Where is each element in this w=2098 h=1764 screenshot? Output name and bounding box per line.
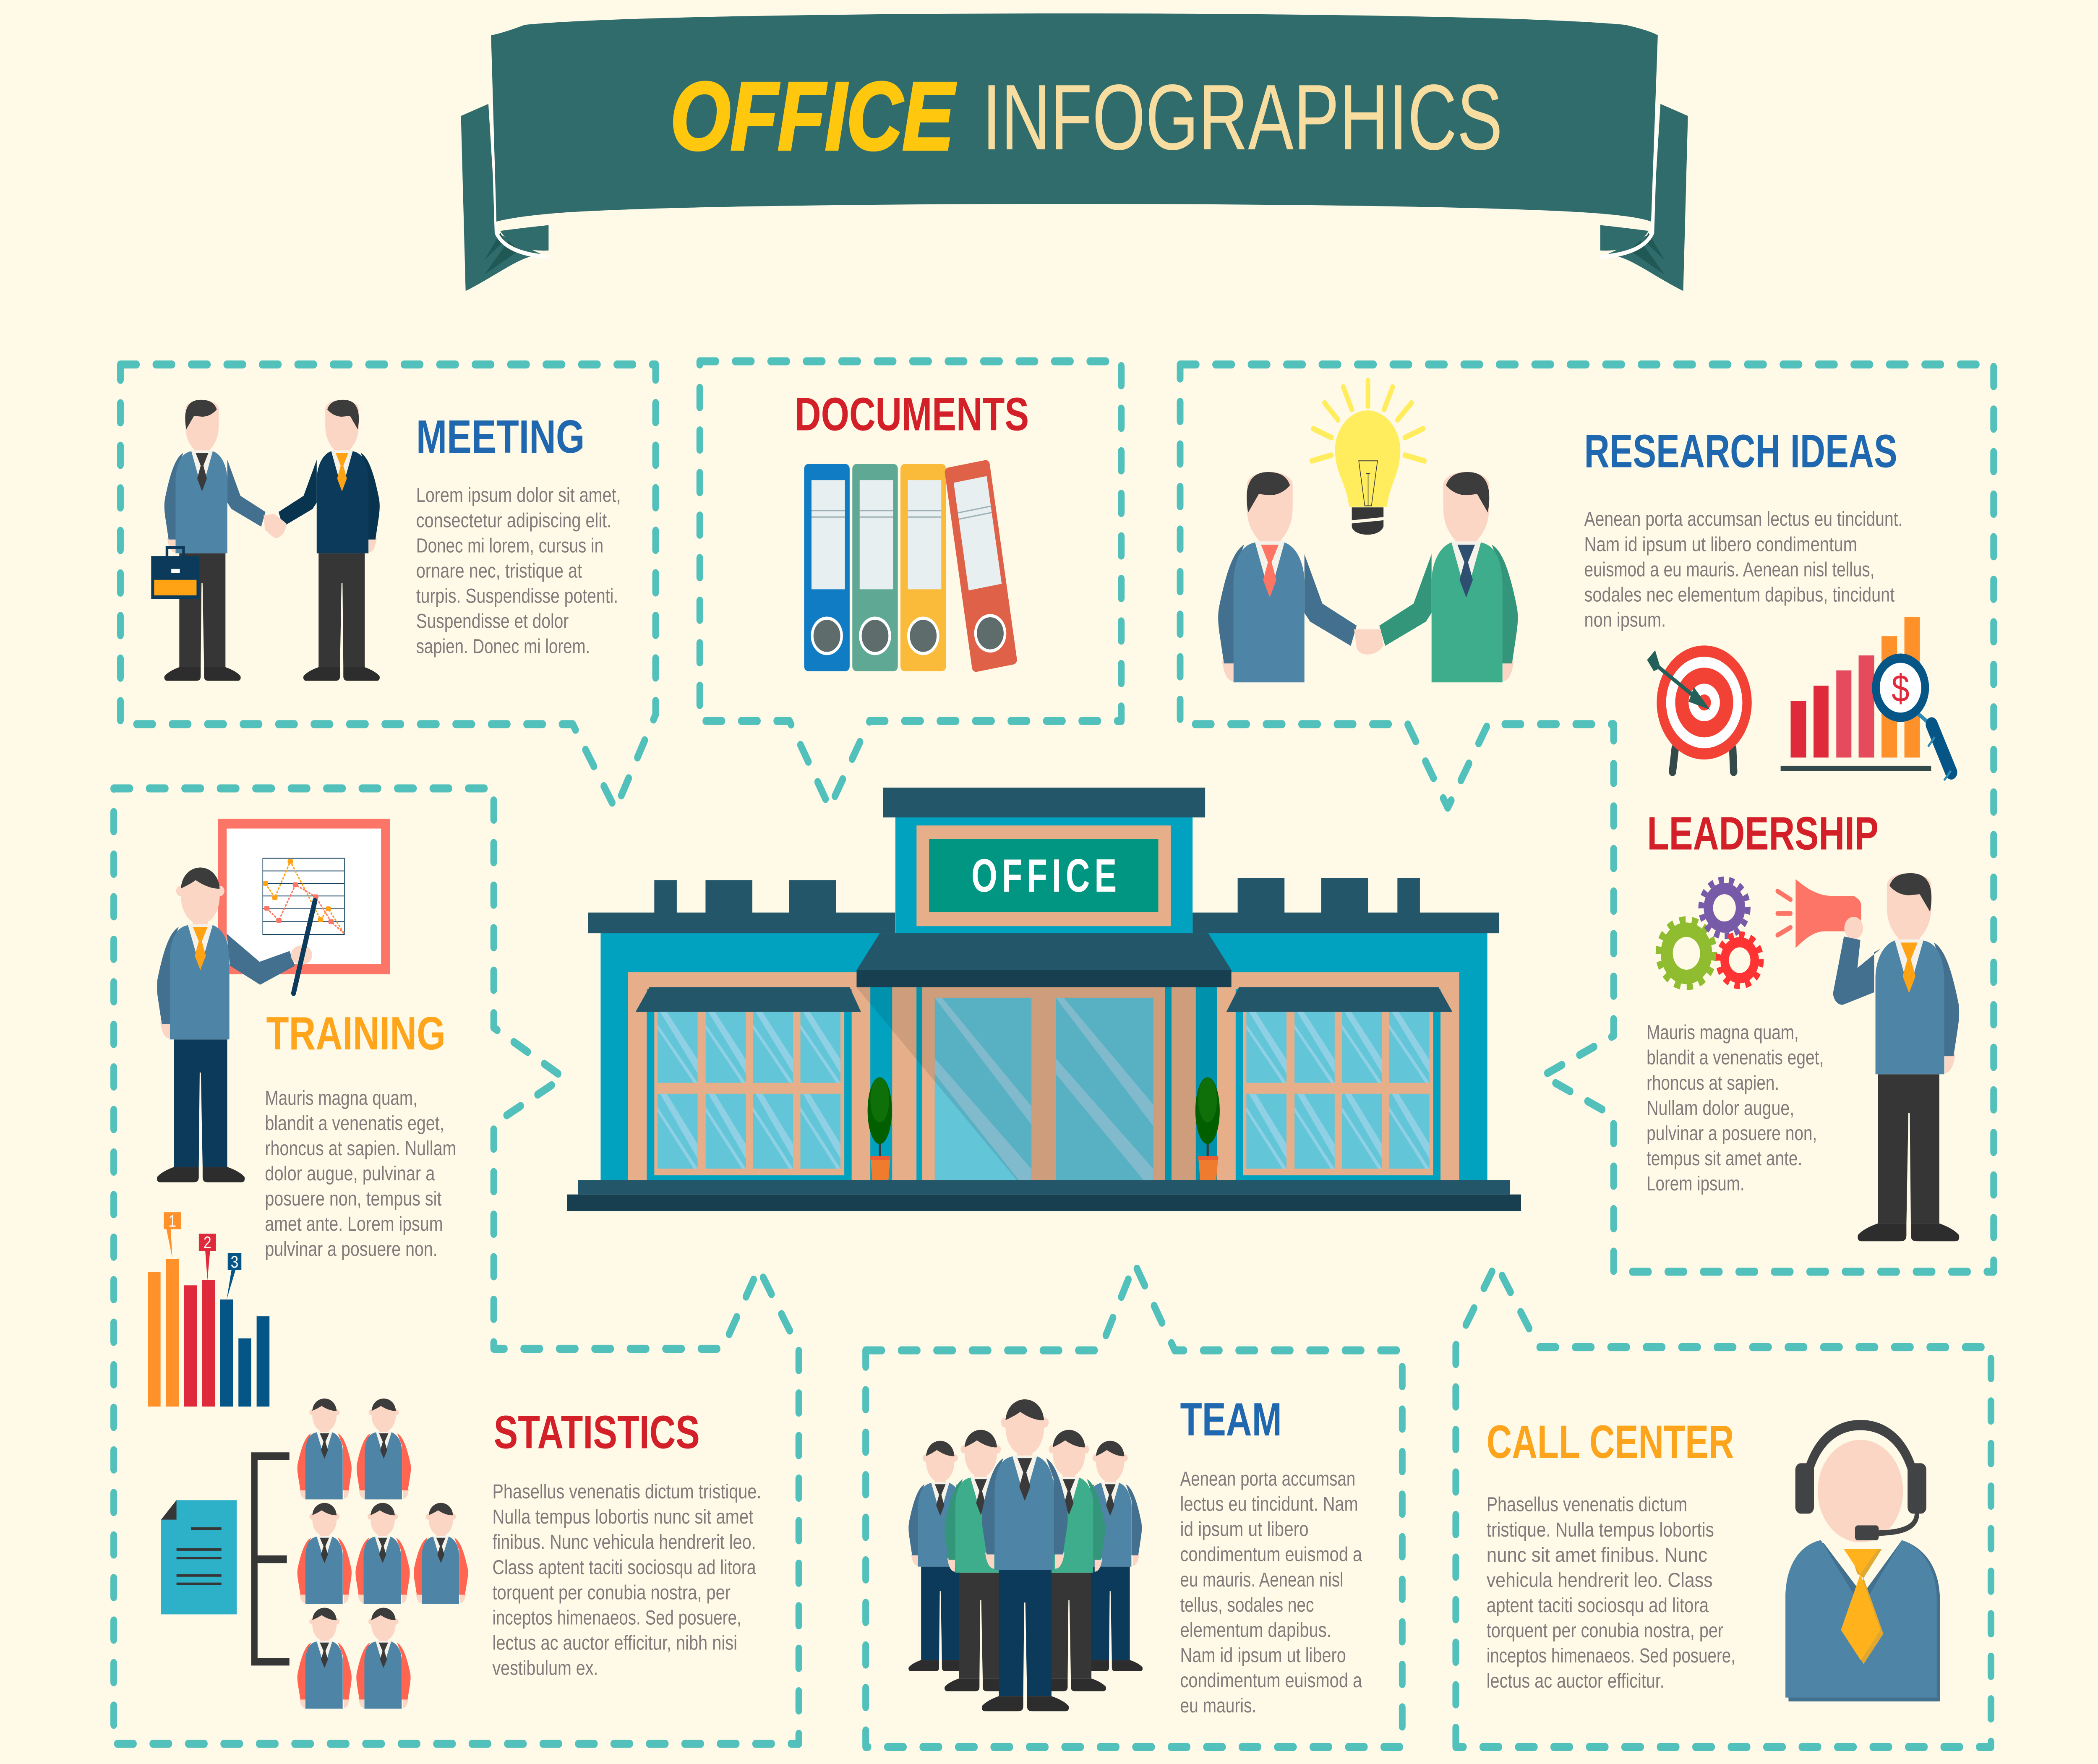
icon: light bulb	[1312, 381, 1424, 535]
text: meeting body: turpis. Suspendisse potenti.	[416, 585, 618, 607]
text: call center body: torquent per conubia nostra, per	[1487, 1620, 1723, 1642]
text: team body: condimentum euismod a	[1180, 1670, 1362, 1692]
text: statistics body: inceptos himenaeos. Sed posuere,	[492, 1607, 741, 1629]
panel: team	[866, 1264, 1402, 1747]
text: training body	[265, 1087, 456, 1260]
right potted plant	[1195, 1077, 1220, 1180]
text: leadership body: Lorem ipsum.	[1647, 1173, 1745, 1195]
central office building	[567, 788, 1521, 1211]
text: research body: euismod a eu mauris. Aenean nisl tellus,	[1584, 558, 1874, 581]
text: research body: sodales nec elementum dapibus, tincidunt	[1584, 584, 1895, 606]
heading: documents: DOCUMENTS	[795, 389, 1029, 440]
icon: bar chart with magnifier	[1781, 617, 1951, 780]
meeting: man with briefcase	[164, 400, 266, 681]
text: team body: eu mauris.	[1180, 1695, 1256, 1717]
icon: gears	[1658, 880, 1761, 987]
panel: training and statistics	[114, 788, 799, 1744]
text: team body: lectus eu tincidunt. Nam	[1180, 1493, 1358, 1515]
text: statistics body: torquent per conubia nostra, per	[492, 1581, 731, 1604]
text: statistics body	[492, 1481, 761, 1679]
training: presenter man	[157, 868, 315, 1182]
text: research body: non ipsum.	[1584, 609, 1666, 631]
text: call center body: tristique. Nulla tempus lobortis	[1487, 1519, 1714, 1541]
bar chart with numbered flags: 3	[231, 1253, 238, 1271]
panel: research ideas and leadership	[1180, 365, 1994, 1272]
main awning	[856, 933, 1232, 987]
bar chart with numbered flags: 2	[204, 1233, 211, 1252]
leadership: man with megaphone	[1833, 873, 1959, 1241]
text: team body: eu mauris. Aenean nisl	[1180, 1568, 1344, 1591]
text: call center body: nunc sit amet finibus. Nunc	[1487, 1544, 1707, 1566]
text: team body: elementum dapibus.	[1180, 1619, 1331, 1641]
heading: call center: CALL CENTER	[1487, 1416, 1734, 1468]
org chart people row 1	[297, 1399, 411, 1499]
awning shadow	[856, 987, 1217, 1180]
icon: yellow binder	[900, 464, 946, 671]
text: meeting body: sapien. Donec mi lorem.	[416, 635, 590, 658]
dashed callout outline	[1456, 1264, 1991, 1747]
team group of five men	[908, 1399, 1143, 1711]
icon: green binder	[852, 464, 898, 671]
text: training body: rhoncus at sapien. Nullam	[265, 1138, 456, 1160]
heading: training: TRAINING	[266, 1007, 446, 1059]
research: man in blue suit	[1218, 472, 1357, 682]
text: statistics body: vestibulum ex.	[492, 1657, 598, 1679]
dashed callout outline	[114, 788, 799, 1744]
right window bay	[1217, 972, 1459, 1180]
building body	[600, 933, 1487, 1180]
text: meeting body: Lorem ipsum dolor sit amet,	[416, 484, 621, 506]
text: statistics body: lectus ac auctor efficitur, nibh nisi	[492, 1632, 737, 1654]
text: training body: dolor augue, pulvinar a	[265, 1163, 435, 1185]
text: leadership body: pulvinar a posuere non,	[1647, 1122, 1817, 1145]
icon: bar chart with magnifier: $	[1892, 667, 1910, 710]
icon: briefcase	[151, 548, 199, 599]
text: team body	[1180, 1468, 1362, 1717]
middle row man left	[945, 1430, 1018, 1691]
title text: INFOGRAPHICS: INFOGRAPHICS	[982, 65, 1503, 170]
dashed callout outline	[700, 361, 1121, 808]
bar chart with numbered flags	[148, 1212, 269, 1407]
heading: leadership: LEADERSHIP	[1647, 807, 1879, 859]
back row man right	[1078, 1441, 1143, 1671]
heading: team: TEAM	[1180, 1393, 1282, 1446]
icon: headset	[1795, 1425, 1926, 1540]
entrance doors	[870, 971, 1217, 1180]
agent face	[1818, 1440, 1903, 1542]
text: team body: Aenean porta accumsan	[1180, 1468, 1355, 1490]
meeting: man in navy suit	[279, 400, 380, 681]
icon: target with arrow	[1647, 645, 1752, 772]
text: meeting body: consectetur adipiscing elit.	[416, 509, 611, 532]
text: research body: Aenean porta accumsan lectus eu tincidunt.	[1584, 508, 1902, 530]
text: leadership body: Nullam dolor augue,	[1647, 1097, 1794, 1119]
text: training body: amet ante. Lorem ipsum	[265, 1213, 443, 1235]
building base steps	[567, 1180, 1521, 1211]
left window bay	[628, 972, 870, 1180]
bar chart with numbered flags: 1	[168, 1212, 176, 1230]
text: leadership body: blandit a venenatis eget,	[1647, 1046, 1824, 1069]
icon: red tilted binder	[944, 459, 1018, 673]
title banner	[461, 13, 1688, 291]
icon: presentation board	[218, 819, 390, 974]
text: call center body: Phasellus venenatis dictum	[1487, 1493, 1687, 1516]
text: meeting body: ornare nec, tristique at	[416, 560, 582, 582]
banner right tail	[1600, 104, 1688, 291]
text: leadership body: rhoncus at sapien.	[1647, 1072, 1779, 1094]
text: training body: pulvinar a posuere non.	[265, 1238, 438, 1260]
icon: document	[161, 1500, 237, 1614]
text: statistics body: Class aptent taciti sociosqu ad litora	[492, 1556, 756, 1579]
text: statistics body: Phasellus venenatis dictum tristique.	[492, 1481, 761, 1503]
banner body	[491, 13, 1658, 222]
org chart people row 3	[297, 1608, 411, 1709]
text: training body: blandit a venenatis eget,	[265, 1112, 444, 1135]
text: training body: Mauris magna quam,	[265, 1087, 418, 1109]
icon: blue binder	[804, 464, 850, 671]
text: research body	[1584, 508, 1902, 631]
text: team body: tellus, sodales nec	[1180, 1594, 1314, 1616]
text: meeting body: Donec mi lorem, cursus in	[416, 535, 603, 557]
agent torso	[1788, 1540, 1940, 1701]
panel: documents	[700, 361, 1121, 808]
dashed callout outline	[120, 365, 656, 809]
text: call center body	[1487, 1493, 1735, 1692]
roof parapets and chimneys	[588, 878, 1499, 933]
text: training body: posuere non, tempus sit	[265, 1188, 442, 1210]
front man	[982, 1399, 1069, 1711]
text: call center body: aptent taciti sociosqu ad litora	[1487, 1594, 1709, 1617]
text: team body: Nam id ipsum ut libero	[1180, 1644, 1346, 1667]
text: call center body: vehicula hendrerit leo. Class	[1487, 1569, 1713, 1592]
agent tie	[1841, 1549, 1884, 1664]
research handshake hands	[1354, 629, 1383, 655]
call center agent with headset	[1785, 1425, 1940, 1701]
panel: meeting	[120, 365, 656, 809]
text: team body: condimentum euismod a	[1180, 1543, 1362, 1566]
handshake hands	[264, 514, 286, 538]
org chart bracket	[251, 1452, 290, 1665]
text: team body: id ipsum ut libero	[1180, 1518, 1309, 1540]
left potted plant	[868, 1077, 892, 1180]
banner left tail	[461, 104, 548, 291]
research: man in green suit	[1379, 472, 1518, 682]
text: leadership body: tempus sit amet ante.	[1647, 1148, 1802, 1170]
text: statistics body: finibus. Nunc vehicula hendrerit leo.	[492, 1531, 756, 1553]
text: call center body: lectus ac auctor efficitur.	[1487, 1670, 1665, 1692]
sign text: OFFICE	[971, 850, 1121, 902]
back row man left	[908, 1441, 973, 1671]
heading: research ideas: RESEARCH IDEAS	[1584, 425, 1897, 477]
text: leadership body	[1647, 1021, 1824, 1195]
sign tower	[883, 788, 1205, 933]
panel: call center	[1456, 1264, 1991, 1747]
heading: statistics: STATISTICS	[494, 1407, 700, 1459]
dashed callout outline	[1180, 365, 1994, 1272]
text: meeting body: Suspendisse et dolor	[416, 610, 569, 632]
text: research body: Nam id ipsum ut libero condimentum	[1584, 533, 1857, 556]
heading: meeting: MEETING	[416, 411, 585, 463]
text: statistics body: Nulla tempus lobortis nunc sit amet	[492, 1506, 754, 1528]
middle row man right	[1033, 1430, 1106, 1691]
text: leadership body: Mauris magna quam,	[1647, 1021, 1799, 1044]
title text: OFFICE: OFFICE	[671, 62, 956, 170]
text: meeting body	[416, 484, 621, 658]
org chart people row 2	[297, 1503, 468, 1604]
dashed callout outline	[866, 1264, 1402, 1747]
icon: megaphone	[1777, 879, 1861, 948]
text: call center body: inceptos himenaeos. Sed posuere,	[1487, 1645, 1735, 1667]
